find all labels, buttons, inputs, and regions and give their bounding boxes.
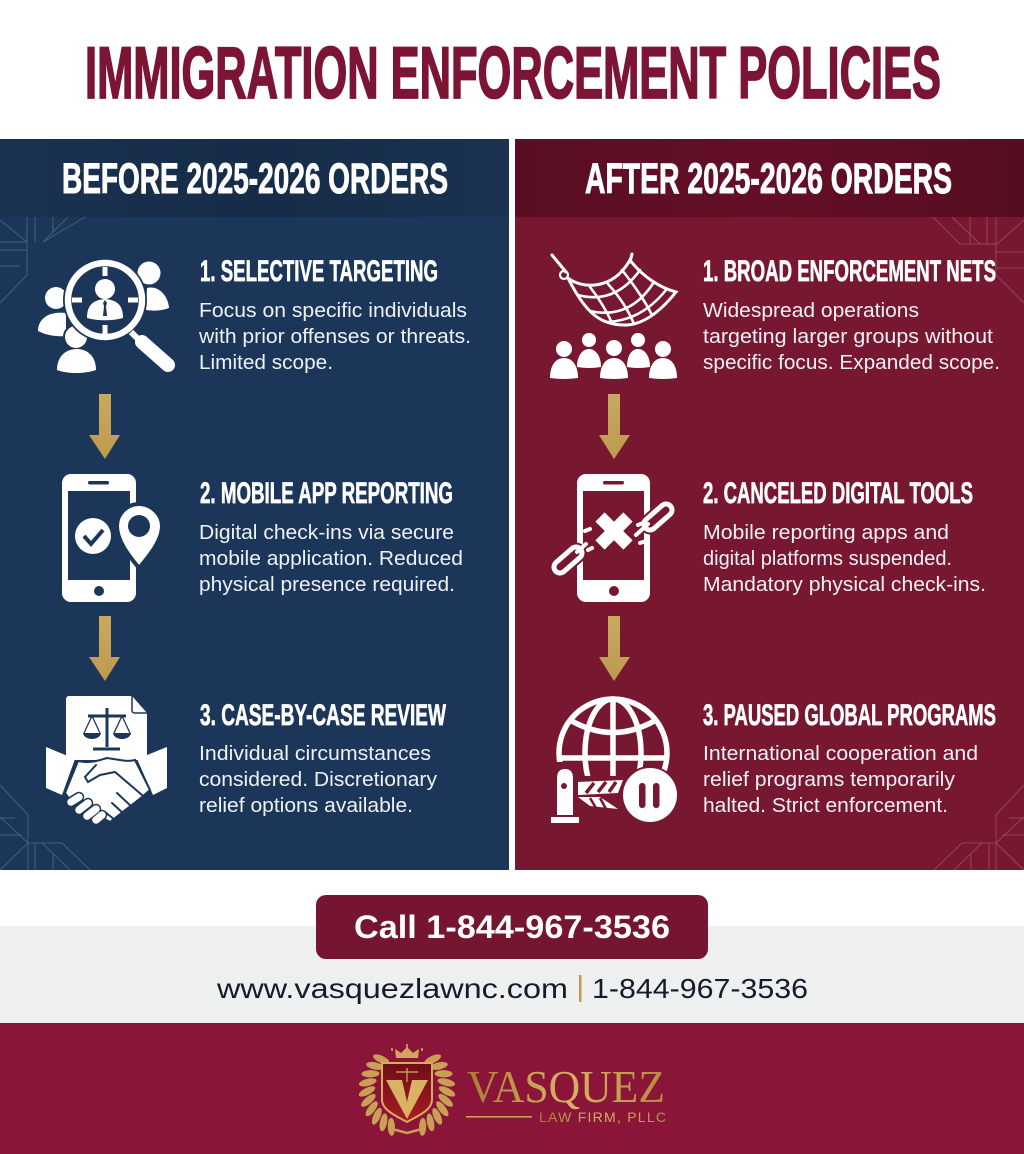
call button [316, 895, 708, 959]
description: Widespread operations [703, 299, 919, 322]
icon: net over crowd [550, 254, 677, 379]
description: digital platforms suspended. [703, 547, 952, 570]
description [199, 521, 463, 596]
item: paused global programs [551, 699, 996, 826]
icon: magnifier over people [38, 258, 169, 373]
left panel header [0, 139, 509, 217]
arrow [89, 616, 120, 681]
description: International cooperation and [703, 742, 978, 765]
icon: phone with check and pin [62, 474, 162, 602]
arrow [599, 394, 630, 459]
footer band [0, 1023, 1024, 1154]
description: considered. Discretionary [199, 768, 438, 791]
website and phone: 1-844-967-3536 [592, 973, 808, 1004]
description: targeting larger groups without [703, 325, 993, 348]
icon: phone with broken chain [560, 474, 666, 602]
right panel header [515, 139, 1024, 217]
description: Focus on specific individuals [199, 299, 467, 322]
heading: 1. SELECTIVE TARGETING [200, 255, 438, 288]
panel: before orders [0, 139, 509, 870]
description [703, 521, 986, 596]
description: mobile application. Reduced [199, 547, 463, 570]
logo crest [357, 1044, 457, 1136]
arrow [599, 616, 630, 681]
description: Mobile reporting apps and [703, 521, 949, 544]
left panel header: BEFORE 2025-2026 ORDERS [62, 155, 448, 203]
logo name: VASQUEZ [467, 1062, 665, 1112]
arrow [89, 394, 120, 459]
description: Limited scope. [199, 351, 333, 374]
description: physical presence required. [199, 573, 455, 596]
website and phone: www.vasquezlawnc.com [216, 973, 568, 1004]
description: Digital check-ins via secure [199, 521, 454, 544]
description [703, 742, 978, 817]
item: mobile app reporting [62, 474, 463, 602]
logo subtitle: LAW FIRM, PLLC [539, 1109, 666, 1125]
item: case-by-case review [46, 696, 446, 822]
logo: Vasquez Law Firm [357, 1044, 666, 1136]
panel: after orders [515, 139, 1024, 870]
item: broad enforcement nets [550, 254, 1000, 379]
description: with prior offenses or threats. [198, 325, 471, 348]
description: Individual circumstances [199, 742, 431, 765]
description: relief options available. [199, 794, 413, 817]
heading: 3. CASE-BY-CASE REVIEW [200, 699, 446, 732]
icon: scales document and handshake [46, 696, 167, 822]
website and phone [216, 973, 808, 1004]
description: specific focus. Expanded scope. [703, 351, 1000, 374]
description [198, 299, 471, 374]
description: Mandatory physical check-ins. [703, 573, 986, 596]
item: selective targeting [38, 255, 471, 374]
item: canceled digital tools [560, 474, 986, 602]
contact band [0, 895, 1024, 1023]
call button: Call 1-844-967-3536 [354, 909, 670, 945]
description [703, 299, 1000, 374]
description [199, 742, 438, 817]
heading: 2. MOBILE APP REPORTING [200, 477, 453, 510]
description: relief programs temporarily [703, 768, 956, 791]
icon: globe with barrier and pause [551, 699, 679, 826]
description: halted. Strict enforcement. [703, 794, 948, 817]
